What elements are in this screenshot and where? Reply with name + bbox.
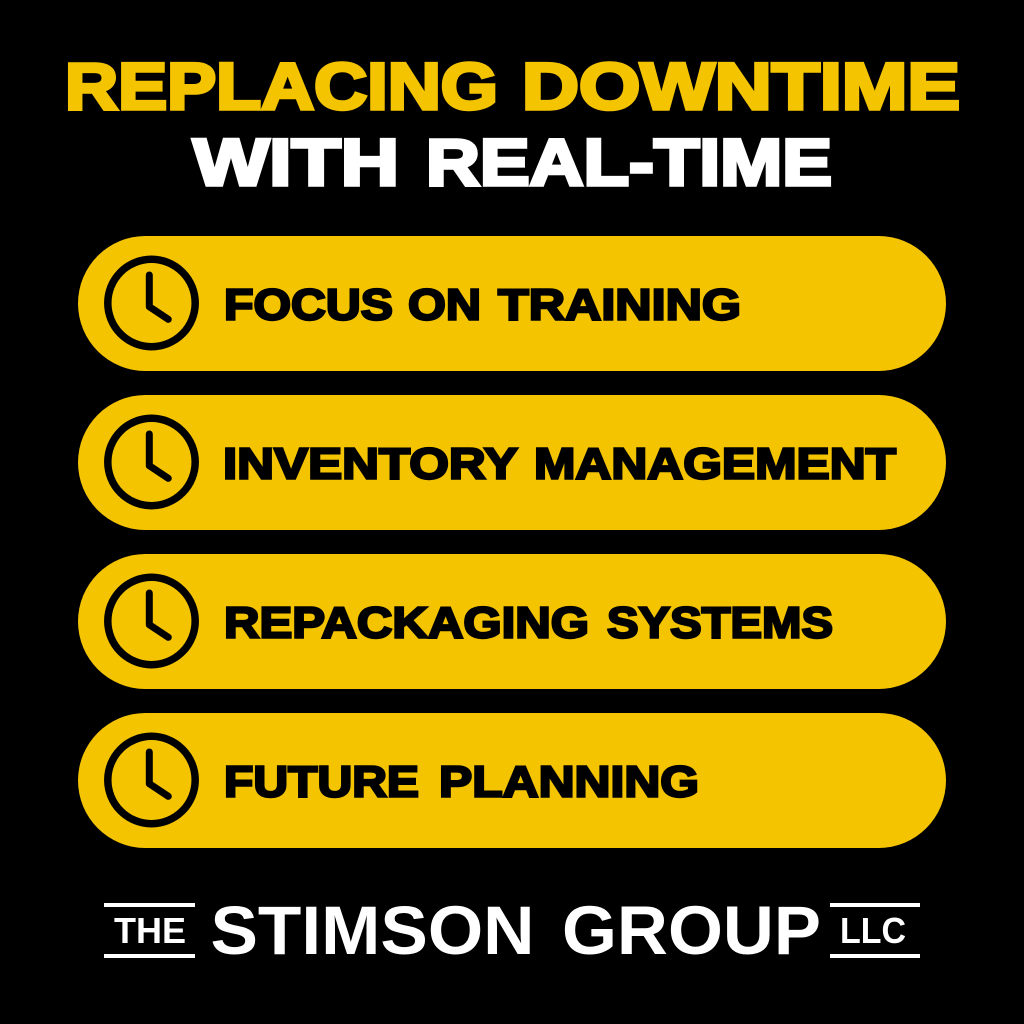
title line 2: WITH <box>193 125 399 199</box>
panel: future planning <box>78 713 946 848</box>
panel: inventory management <box>78 395 946 530</box>
logo: The Stimson Group LLC: STIMSON <box>210 892 534 969</box>
logo: The Stimson Group LLC: LLC <box>840 910 906 951</box>
label: FOCUS <box>224 280 393 330</box>
logo: The Stimson Group LLC <box>104 892 920 969</box>
title line 1: DOWNTIME <box>522 49 960 123</box>
label: FUTURE <box>224 758 419 806</box>
panel: repackaging systems <box>78 554 946 689</box>
logo: The Stimson Group LLC: THE <box>114 910 186 951</box>
icon: clock <box>108 736 195 824</box>
label: ON <box>408 280 481 330</box>
label: INVENTORY <box>223 440 518 488</box>
title line 1: REPLACING <box>65 49 498 123</box>
logo: The Stimson Group LLC: GROUP <box>562 892 821 969</box>
label: SYSTEMS <box>607 598 833 648</box>
label: REPACKAGING <box>224 598 589 648</box>
title line 2: REAL-TIME <box>426 125 832 199</box>
icon: clock <box>108 259 195 347</box>
label: PLANNING <box>439 758 699 806</box>
panel: focus on training <box>78 236 946 371</box>
label: MANAGEMENT <box>534 440 896 488</box>
icon: clock <box>108 577 195 665</box>
label: TRAINING <box>498 280 741 330</box>
title <box>65 49 960 199</box>
icon: clock <box>108 418 195 506</box>
